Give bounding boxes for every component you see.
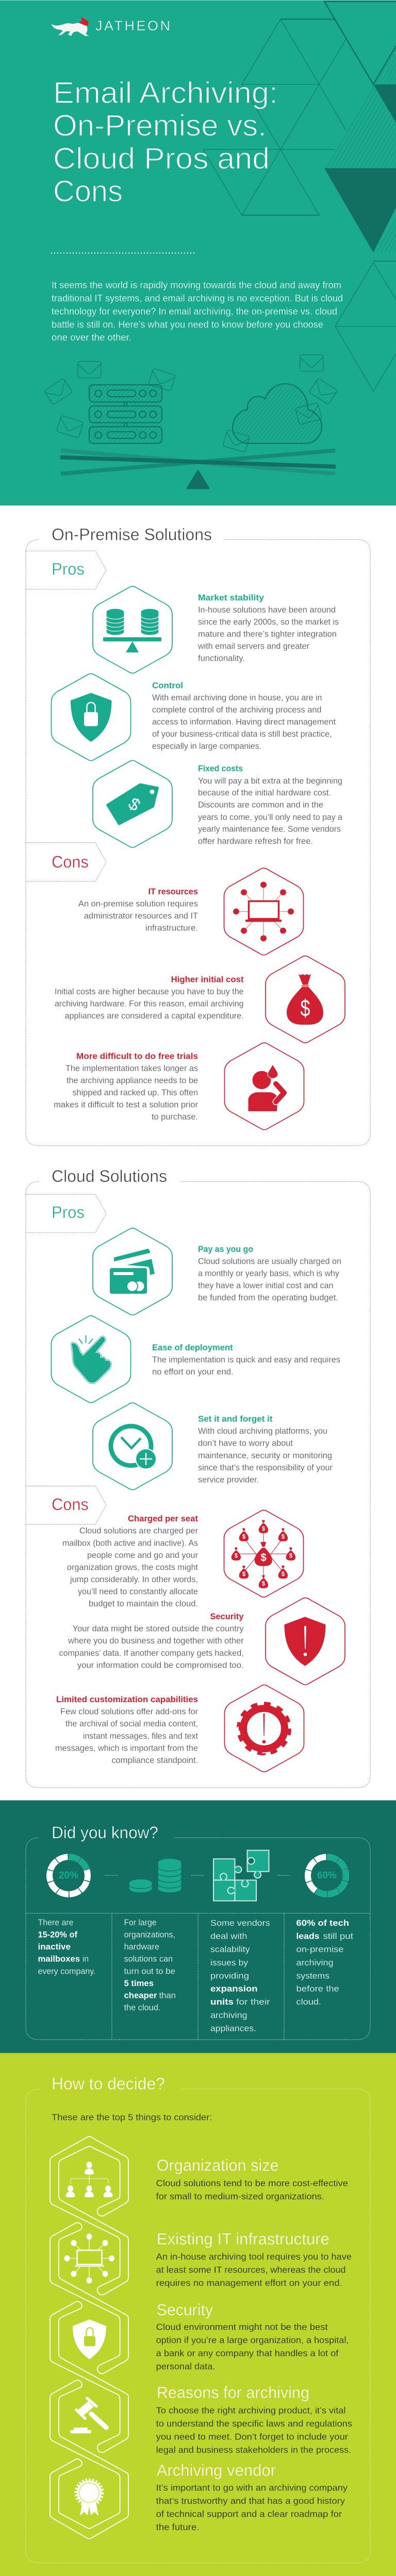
text: expansion units: scalability [210,1944,250,1954]
text: archiving vendor: of technical support and a clear roadmap for [156,2509,342,2519]
title: Cons [53,174,123,208]
text: security: where you do business and together with other [68,1636,244,1646]
text: higher initial cost: appliances are considered a capital expenditure. [64,1011,244,1021]
icon: shield with exclamation [266,1598,345,1685]
text: archiving vendor: Archiving vendor [157,2461,276,2479]
panel: on-premise solutions [26,525,370,1146]
intro text [52,279,343,343]
text: tech leads: cloud. [296,1997,321,2007]
text: pay as you go: be funded from the operating budget. [198,1293,338,1302]
text: security consideration [156,2300,349,2371]
text: security consideration: Security [157,2300,213,2319]
text: security: Security [210,1612,244,1621]
text: organization size [156,2156,348,2201]
text: tech leads: leads [296,1931,319,1941]
text: limited customization capabilities: the archival of social media content, [65,1719,198,1728]
intro text: battle is still on. Here’s what you need to know before you choose [52,319,323,330]
logo [52,16,170,36]
text: existing IT infrastructure [156,2230,352,2288]
text: security: companies’ data. If another company gets hacked, [59,1649,244,1658]
icon: money bag network: $ [262,1525,266,1532]
icon: price tag: $ [125,794,144,815]
text: expansion units: expansion [210,1984,258,1993]
text: tech leads: systems [296,1971,329,1980]
text: IT resources: infrastructure. [145,924,198,933]
text: existing IT infrastructure: requires no management effort on your end. [156,2278,342,2288]
icon: money bag network: $ [242,1533,246,1540]
text: expansion units: Some vendors [210,1918,270,1928]
heading: cloud solutions: Cloud Solutions [52,1166,167,1185]
text: security consideration: personal data. [156,2361,215,2371]
title [53,76,278,208]
text: limited customization capabilities: instant messages, files and text [83,1732,198,1741]
tab: cons: Cons [52,852,89,871]
icon: money bag network: $ [289,1552,293,1560]
text: inactive mailboxes: There are [38,1918,73,1927]
text: existing IT infrastructure: An in-house archiving tool requires you to have [156,2251,352,2262]
text: inactive mailboxes: every company. [38,1967,96,1976]
text: tech leads [296,1918,353,2007]
title: On-Premise vs. [53,108,267,143]
text: inactive mailboxes: inactive [38,1942,71,1952]
text: market stability: with email servers and greater [197,642,310,651]
text: reasons for archiving: To choose the right archiving product, it’s vital [156,2405,346,2415]
icon: balance coins [93,586,172,673]
icon: shield with lock [73,2319,106,2359]
text: organization size: for small to medium-sized organizations. [156,2191,324,2201]
text: control: especially in large companies. [152,742,261,751]
tab: pros: Pros [52,560,85,578]
intro text: traditional IT systems, and email archiving is no exception. But is cloud [52,293,343,303]
text: charged per seat: Cloud solutions are charged per [79,1527,199,1536]
text: IT resources [78,887,198,933]
text: market stability [197,593,339,663]
panel: did you know [0,1800,396,2053]
text: fixed costs: yearly maintenance fee. Some vendors [198,825,341,834]
text: charged per seat: mailbox (both active and inactive). As [62,1539,198,1548]
text: pay as you go: Pay as you go [198,1244,253,1254]
tab: cloud pros [26,1194,106,1232]
text: charged per seat: organization grows, the costs might [67,1563,198,1572]
text: limited customization capabilities: compliance standpoint. [111,1756,198,1765]
text: more difficult to do free trials: The implementation takes longer as [65,1064,198,1073]
text: control: of your business-critical data is still best practice, [152,730,332,739]
text: inactive mailboxes: in [82,1954,89,1964]
text: tech leads: on-premise [296,1944,343,1954]
text: archiving vendor [156,2461,348,2532]
icon: gear with exclamation [225,1685,304,1772]
text: hardware cheaper: cheaper [124,1991,157,2001]
icon: IT network [224,868,303,955]
text: pay as you go [198,1244,341,1302]
icon: money bag network: $ [262,1580,266,1587]
text: hardware cheaper: 5 times [124,1978,154,1988]
text: IT resources: IT resources [148,887,198,896]
text: set it and forget it: maintenance, security or monitoring [198,1451,332,1460]
tab: cons [26,843,106,882]
text: hardware cheaper: organizations, [124,1930,175,1939]
text: control [152,681,336,751]
text: pay as you go: they have a lower initial cost and can [198,1281,333,1290]
title: Cloud Pros and [53,141,270,175]
text: security consideration: option if you’re a large organization, a hospital, [156,2335,349,2345]
tab: cloud pros: Pros [52,1203,85,1222]
text: inactive mailboxes [38,1918,96,1976]
text: set it and forget it: service provider. [198,1476,259,1485]
text: limited customization capabilities: Few cloud solutions offer add-ons for [60,1707,199,1716]
icon: laptop network [64,2233,114,2283]
text: charged per seat [62,1514,199,1608]
icon: clock with plus [93,1403,172,1490]
chart: 60 percent donut [308,1857,346,1894]
icon: puzzle pieces [213,1850,269,1901]
panel: cloud solutions [26,1166,370,1788]
text: ease of deployment: no effort on your end. [152,1367,234,1377]
text: organization size: Organization size [157,2156,279,2174]
logo: JATHEON [95,18,170,33]
text: pay as you go: Cloud solutions are usually charged on [198,1257,341,1266]
text: market stability: since the early 2000s, so the market is [198,618,339,626]
text: more difficult to do free trials: the archiving appliance needs to be [67,1076,198,1085]
text: charged per seat: people come and go and your [87,1551,199,1560]
icon: person with sweat drop [225,1043,304,1130]
text: IT resources: administrator resources and IT [84,911,198,921]
text: control: With email archiving done in house, you are in [152,693,322,702]
text: higher initial cost [55,975,244,1021]
icon: money bag network [224,1510,303,1597]
text: expansion units: archiving [210,2010,247,2020]
icon: coin stacks [129,1858,182,1893]
text: tech leads: before the [296,1984,339,1993]
text: intro line: These are the top 5 things to consider: [52,2112,212,2122]
text: inactive mailboxes: mailboxes [38,1954,80,1964]
text: tech leads: 60% of tech [296,1918,349,1928]
text: security: Your data might be stored outside the country [73,1624,244,1634]
text: charged per seat: Charged per seat [128,1514,198,1523]
chart: 60 percent donut: 60% [317,1870,337,1881]
title: Email Archiving: [53,76,278,110]
text: set it and forget it: With cloud archiving platforms, you [198,1427,327,1436]
text: more difficult to do free trials: makes it difficult to test a solution prior [54,1100,199,1110]
text: control: complete control of the archiving process and [152,705,322,715]
icon: money bag network: $ [282,1570,285,1578]
text: market stability: Market stability [198,593,265,602]
text: fixed costs: Fixed costs [198,764,243,773]
text: market stability: mature and there’s tighter integration [198,630,337,639]
text: set it and forget it [198,1414,333,1485]
text: organization size: Cloud solutions tend to be more cost-effective [156,2178,348,2188]
text: hardware cheaper: the cloud. [124,2003,161,2012]
text: expansion units: for their [236,1997,270,2007]
text: expansion units: units [210,1997,234,2007]
text: higher initial cost: Higher initial cost [171,975,244,984]
text: fixed costs [198,764,343,846]
text: set it and forget it: since that’s the responsibility of your [198,1463,333,1472]
icon: shield with lock [52,674,131,760]
intro text: technology for everyone? In email archiving, the on-premise vs. cloud [52,306,337,316]
text: expansion units: deal with [210,1931,247,1941]
text: fixed costs: because of the initial hardware cost. [198,788,331,798]
text: set it and forget it: Set it and forget it [198,1414,273,1423]
text: market stability: functionality. [198,654,245,663]
icon: finger snap [52,1316,131,1403]
text: expansion units [210,1918,270,2033]
text: tech leads: still put [323,1931,353,1941]
text: more difficult to do free trials: shipped and racked up. This often [73,1088,198,1097]
icon: money bag network: $ [242,1570,246,1578]
icon: money bag network: $ [282,1533,285,1540]
text: market stability: In-house solutions have been around [198,605,336,615]
text: tech leads: archiving [296,1958,334,1968]
intro text: It seems the world is rapidly moving towards the cloud and away from [52,279,341,290]
text: hardware cheaper [124,1918,176,2012]
text: archiving vendor: the future. [156,2522,199,2532]
text: reasons for archiving: to understand the specific laws and regulations [156,2418,352,2429]
text: higher initial cost: archiving hardware. For this reason, email archiving [55,999,244,1008]
icon: money bag network: $ [235,1552,238,1560]
text: hardware cheaper: than [159,1991,176,2001]
icon: money bag: $ [300,995,310,1021]
text: existing IT infrastructure: Existing IT infrastructure [157,2230,329,2248]
text: hardware cheaper: turn out to be [124,1967,175,1976]
heading: did you know: Did you know? [52,1823,158,1842]
panel: hero [0,0,396,505]
text: set it and forget it: don’t have to worry about [198,1438,293,1448]
illustration: balance of server and cloud [44,355,338,488]
text: fixed costs: years to come, you’ll only need to pay a [198,812,343,822]
text: fixed costs: Discounts are common and in the [198,800,323,809]
icon: organization chart [66,2162,113,2197]
text: more difficult to do free trials: More difficult to do free trials [76,1052,198,1061]
icon: award rosette [76,2480,103,2516]
text: pay as you go: a monthly or yearly basis, which is why [198,1269,340,1278]
text: reasons for archiving: legal and business stakeholders in the process. [156,2445,351,2455]
icon: credit cards [93,1228,172,1315]
text: security [59,1612,244,1670]
tab: pros [26,551,106,589]
text: expansion units: issues by [210,1958,249,1968]
text: hardware cheaper: solutions can [124,1954,173,1964]
text: security consideration: a bank or any company that handles a lot of [156,2348,338,2359]
panel: how to decide [0,2053,396,2576]
text: limited customization capabilities: Limited customization capabilities [56,1694,198,1704]
text: charged per seat: jump considerably. In other words, [70,1575,198,1584]
text: fixed costs: offer hardware refresh for free. [198,837,313,846]
text: archiving vendor: that’s trustworthy and that has a good history [156,2496,345,2506]
text: reasons for archiving [156,2383,352,2455]
text: limited customization capabilities [55,1694,199,1765]
icon: gavel [70,2398,106,2433]
text: control: access to information. Having direct management [152,718,336,727]
text: reasons for archiving: Reasons for archiving [157,2383,309,2402]
chart: 20 percent donut: 20% [59,1870,78,1881]
text: security consideration: Cloud environment might not be the best [156,2322,328,2332]
text: charged per seat: budget to maintain the cloud. [89,1599,198,1608]
ribbon of hexagons [50,2137,128,2538]
text: hardware cheaper: For large [124,1918,157,1927]
text: ease of deployment: The implementation is quick and easy and requires [152,1355,340,1365]
icon: price tag [93,760,172,848]
text: ease of deployment: Ease of deployment [152,1343,233,1352]
heading: on-premise solutions: On-Premise Solutions [52,525,212,544]
text: reasons for archiving: you need to meet. Don’t forget to include your [156,2432,348,2442]
text: hardware cheaper: hardware [124,1942,159,1952]
text: limited customization capabilities: messages, which is important from the [55,1743,198,1753]
chart: 20 percent donut [50,1857,88,1894]
text: ease of deployment [152,1343,340,1377]
text: more difficult to do free trials [54,1052,199,1122]
text: IT resources: An on-premise solution requires [78,900,198,908]
text: security: your information could be compromised too. [77,1660,244,1670]
text: higher initial cost: Initial costs are higher because you have to buy the [55,987,244,996]
text: more difficult to do free trials: to purchase. [152,1112,198,1122]
tab: cloud cons [26,1486,106,1524]
intro text: one over the other. [52,332,131,343]
text: expansion units: appliances. [210,2024,256,2033]
text: control: Control [152,681,183,690]
text: charged per seat: you’ll need to constantly allocate [78,1587,198,1596]
text: fixed costs: You will pay a bit extra at the beginning [198,776,342,786]
icon: money bag network: $ [260,1551,267,1564]
text: inactive mailboxes: 15-20% of [38,1930,77,1939]
text: expansion units: providing [210,1971,249,1980]
text: existing IT infrastructure: at least some IT resources, whereas the cloud [156,2265,346,2275]
heading: how to decide: How to decide? [52,2074,165,2093]
text: archiving vendor: It’s important to go with an archiving company [156,2483,348,2493]
icon: money bag [266,956,345,1043]
tab: cloud cons: Cons [52,1495,89,1514]
